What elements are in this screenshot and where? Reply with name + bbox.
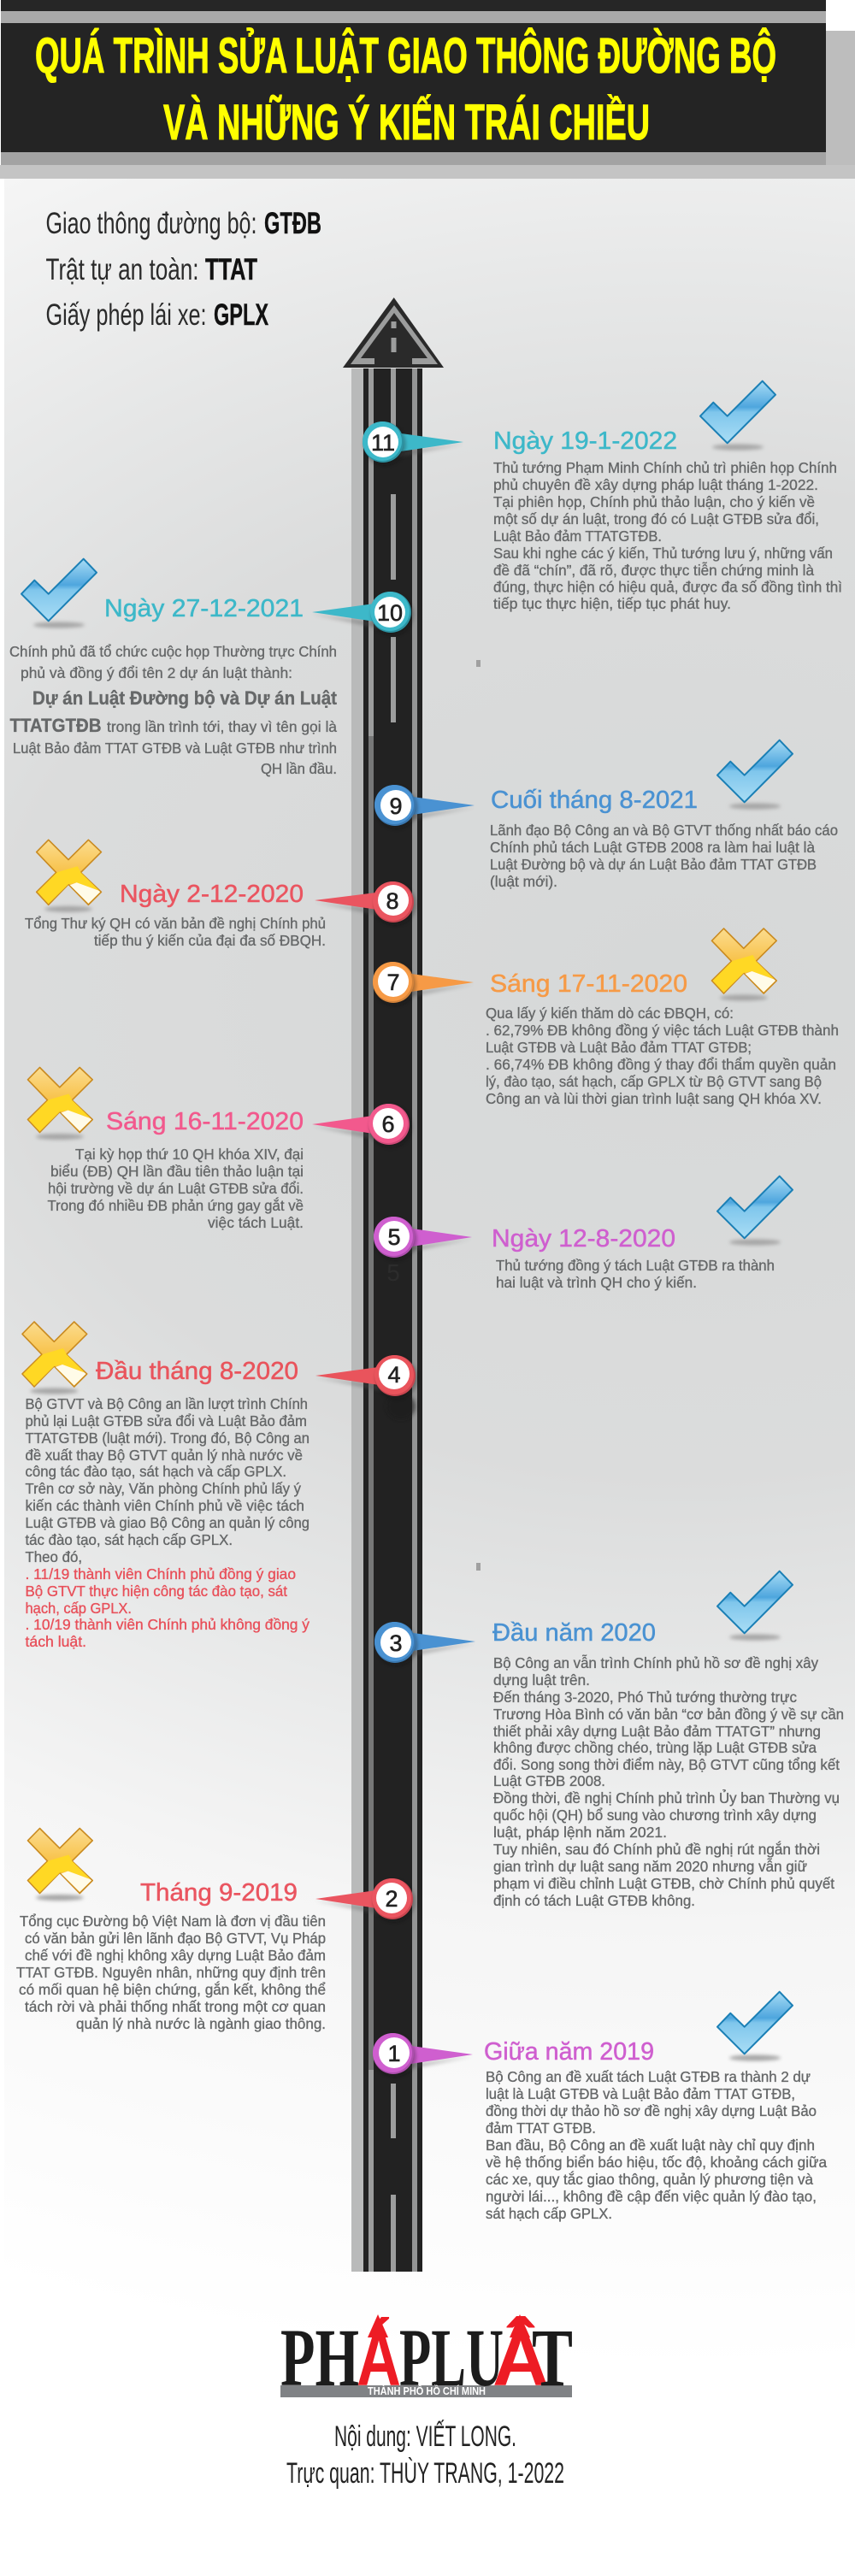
logo: Â: [492, 2315, 549, 2402]
text block: có mối quan hệ biện chứng, gắn kết, không thể: [19, 1980, 326, 1998]
marker 3: 3: [389, 1630, 403, 1656]
panel: event 10: [9, 559, 413, 777]
text block: chế với đề nghị không xây dựng Luật Bảo đảm: [25, 1947, 326, 1964]
text block: Đồng thời, đề nghị Chính phủ trình Ủy ban Thường vụ: [493, 1789, 840, 1807]
text block: công tác đào tạo, sát hạch và cấp GPLX.: [26, 1463, 286, 1480]
heading: Sáng 17-11-2020: [490, 970, 687, 998]
marker 6: 6: [381, 1111, 395, 1137]
text block: [493, 459, 842, 612]
credits: Trực quan: THÙY TRANG, 1-2022: [286, 2457, 564, 2490]
abbreviation legend: [46, 207, 321, 332]
abbreviation legend: TTAT: [205, 253, 257, 286]
road: [351, 368, 422, 2272]
marker 9: [374, 785, 475, 828]
text block: Luật Bảo đảm TTATGTĐB.: [493, 528, 662, 545]
text block: Bộ GTVT và Bộ Công an lần lượt trình Chính: [26, 1395, 308, 1412]
text block: Ban đầu, Bộ Công an đề xuất luật này chỉ quy định: [486, 2137, 815, 2154]
marker 10: 10: [377, 600, 403, 626]
icon: cross: [27, 1828, 92, 1901]
text block: biểu (ĐB) QH lần đầu tiên thảo luận tại: [50, 1163, 304, 1180]
text block: tiếp tục thực hiện, tiếp tục phát huy.: [493, 595, 731, 612]
marker 11: [363, 421, 463, 465]
panel: event 2: [16, 1828, 415, 2032]
text block: [48, 1146, 304, 1231]
text block: (luật mới).: [490, 873, 557, 890]
heading: Sáng 16-11-2020: [106, 1108, 304, 1135]
icon: check: [21, 559, 97, 628]
text block: Tại phiên họp, Chính phủ thảo luận, cho ý kiến về: [493, 493, 815, 510]
logo: Á: [357, 2316, 401, 2402]
abbreviation legend: Giấy phép lái xe:: [46, 298, 207, 332]
logo: PLU: [399, 2312, 504, 2403]
text block: đổi. Song song thời điểm này, Bộ GTVT cũng tổng kết: [493, 1756, 840, 1773]
text block: [25, 915, 326, 949]
marker 4: [315, 1355, 417, 1399]
logo: [280, 2312, 573, 2403]
text block: [490, 822, 838, 890]
marker 5: [374, 1217, 472, 1260]
text block: Thủ tướng đồng ý tách Luật GTĐB ra thành: [496, 1257, 775, 1274]
text block: quốc hội (QH) bổ sung vào chương trình xây dựng: [493, 1807, 817, 1824]
panel: event 5: [374, 1176, 793, 1291]
text block: Luật Đường bộ và dự án Luật Bảo đảm TTAT GTĐB: [490, 856, 817, 873]
panel: event 8: [25, 840, 416, 949]
text block: Lãnh đạo Bộ Công an và Bộ GTVT thống nhất báo cáo: [490, 822, 838, 839]
text block: hai luật và trình QH cho ý kiến.: [496, 1274, 697, 1291]
title: [35, 28, 776, 150]
text block: luật là Luật GTĐB và Luật Bảo đảm TTAT GTĐB,: [486, 2085, 795, 2102]
heading: Ngày 12-8-2020: [492, 1225, 675, 1253]
text block: không được chồng chéo, trùng lặp Luật GTĐB sửa: [493, 1739, 817, 1756]
text block: phủ chuyên đề xây dựng pháp luật tháng 1-2022.: [493, 476, 818, 493]
text block: đề xuất thay Bộ GTVT quản lý nhà nước về: [26, 1447, 303, 1464]
text block: Chính phủ đã tổ chức cuộc họp Thường trực Chính: [9, 643, 337, 660]
text block: lý, đào tạo, sát hạch, cấp GPLX từ Bộ GTVT sang Bộ: [486, 1073, 822, 1090]
text block: Chính phủ tách Luật GTĐB 2008 ra làm hai luật là: [490, 839, 815, 856]
text block: trong lần trình tới, thay vì tên gọi là: [107, 718, 337, 735]
text block: Luật Bảo đảm TTAT GTĐB và Luật GTĐB như trình: [13, 740, 337, 757]
text block: dựng luật trên.: [493, 1671, 590, 1689]
marker 7: [373, 962, 474, 1005]
text block: [486, 1005, 839, 1107]
icon: cross: [711, 928, 776, 1000]
abbreviation legend: GPLX: [214, 298, 268, 332]
panel: event 6: [27, 1067, 411, 1231]
heading: Tháng 9-2019: [140, 1879, 298, 1907]
heading: Ngày 27-12-2021: [104, 595, 304, 622]
text block: một số dự án luật, trong đó có Luật GTĐB sửa đổi,: [493, 510, 819, 528]
abbreviation legend: GTĐB: [264, 207, 321, 240]
heading: Cuối tháng 8-2021: [491, 787, 698, 814]
text block: đúng, thực hiện có hiệu quả, được đa số đồng tình thì: [493, 578, 842, 595]
text block: Trên cơ sở này, Văn phòng Chính phủ lấy ý: [26, 1480, 301, 1497]
text block: về hệ thống biển báo hiệu, tốc độ, khoảng cách giữa: [486, 2154, 827, 2171]
text block: có văn bản gửi lên lãnh đạo Bộ GTVT, Vụ Pháp: [25, 1930, 326, 1947]
text block: hội trường về dự án Luật GTĐB sửa đổi.: [48, 1180, 304, 1197]
logo: THÀNH PHỐ HỒ CHÍ MINH: [368, 2384, 486, 2397]
text block: QH lần đầu.: [261, 760, 337, 777]
text block: phạm vi điều chỉnh Luật GTĐB, chờ Chính phủ quyết: [493, 1875, 834, 1892]
text block: Thủ tướng Phạm Minh Chính chủ trì phiên họp Chính: [493, 459, 837, 476]
text block: đồng thời dự thảo hồ sơ đề nghị xây dựng Luật Bảo: [486, 2102, 817, 2119]
icon: cross: [22, 1322, 87, 1394]
marker 11: 11: [371, 430, 395, 456]
marker 1: [373, 2033, 473, 2077]
marker 9: 9: [389, 793, 403, 819]
icon: cross: [37, 840, 101, 912]
text block: Trong đó nhiều ĐB phản ứng gay gắt về: [48, 1196, 304, 1214]
text block: sát hạch cấp GPLX.: [486, 2205, 612, 2222]
text block: phủ và đồng ý đổi tên 2 dự án luật thành:: [21, 664, 292, 681]
text block: [486, 2068, 827, 2222]
marker 4: 4: [387, 1362, 401, 1388]
text block: Công an và lùi thời gian trình luật sang QH khóa XV.: [486, 1090, 822, 1107]
panel: event 3: [374, 1571, 844, 1909]
marker 7: 7: [386, 970, 400, 995]
text block: . 10/19 thành viên Chính phủ không đồng ý: [26, 1616, 310, 1633]
panel: event 1: [373, 1992, 827, 2222]
credits: Nội dung: VIẾT LONG.: [334, 2420, 516, 2453]
text block: Sau khi nghe các ý kiến, Thủ tướng lưu ý, những vấn: [493, 545, 833, 562]
header banner: [0, 0, 855, 179]
marker 3: [374, 1622, 475, 1665]
text block: Trương Hòa Bình có văn bản “cơ bản đồng ý về sự cần: [493, 1706, 844, 1723]
text block: đảm TTAT GTĐB.: [486, 2119, 596, 2137]
text block: tách luật.: [26, 1633, 86, 1650]
text block: Đến tháng 3-2020, Phó Thủ tướng thường trực: [493, 1689, 797, 1706]
icon: check: [717, 1571, 793, 1640]
text block: người lái..., không đề cập đến việc quản lý đào tạo,: [486, 2188, 817, 2205]
heading: Đầu năm 2020: [492, 1619, 656, 1647]
text block: gian trình dự luật sang năm 2020 nhưng vẫn giữ: [493, 1857, 807, 1875]
text block: [16, 1913, 326, 2032]
icon: cross: [27, 1067, 92, 1140]
text block: [26, 1395, 310, 1650]
marker 8: [315, 881, 416, 925]
text block: Bộ Công an vẫn trình Chính phủ hồ sơ đề nghị xây: [493, 1653, 818, 1671]
small road marker: [476, 660, 481, 667]
road: 5: [386, 1259, 400, 1286]
text block: Luật GTĐB và giao Bộ Công an quản lý công: [26, 1514, 310, 1531]
text block: . 62,79% ĐB không đồng ý việc tách Luật GTĐB thành: [486, 1022, 839, 1039]
marker 2: [315, 1878, 415, 1922]
text block: Bộ GTVT thực hiện công tác đào tạo, sát: [26, 1583, 287, 1600]
logo: T: [532, 2312, 573, 2403]
text block: Luật GTĐB 2008.: [493, 1772, 605, 1789]
text block: việc tách Luật.: [208, 1214, 304, 1231]
logo: PH: [280, 2312, 359, 2403]
text block: tách rời và phải thống nhất trong một cơ quan: [25, 1998, 326, 2015]
heading: Đầu tháng 8-2020: [96, 1358, 298, 1385]
text block: tác đào tạo, sát hạch cấp GPLX.: [26, 1531, 233, 1548]
icon: check: [717, 740, 793, 809]
small road marker: [476, 1563, 481, 1571]
panel: event 9: [374, 740, 838, 890]
text block: Tại kỳ họp thứ 10 QH khóa XIV, đại: [75, 1146, 304, 1163]
text block: kiến các thành viên Chính phủ về việc tách: [26, 1497, 304, 1514]
text block: Tuy nhiên, sau đó Chính phủ đề nghị rút ngắn thời: [493, 1840, 820, 1858]
icon: check: [700, 381, 775, 450]
text block: . 66,74% ĐB không đồng ý thay đổi thẩm quyền quản: [486, 1056, 836, 1073]
marker 5: 5: [387, 1224, 401, 1250]
heading: Ngày 2-12-2020: [120, 881, 304, 908]
marker 1: 1: [387, 2041, 401, 2066]
icon: check: [717, 1992, 793, 2060]
text block: Bộ Công an đề xuất tách Luật GTĐB ra thành 2 dự: [486, 2068, 811, 2085]
text block: luật, pháp lệnh năm 2021.: [493, 1824, 667, 1841]
text block: tiếp thu ý kiến của đại đa số ĐBQH.: [94, 932, 326, 949]
text block: [9, 643, 338, 777]
panel: event 4: [22, 1322, 417, 1650]
marker 2: 2: [385, 1886, 398, 1912]
text block: Qua lấy ý kiến thăm dò các ĐBQH, có:: [486, 1005, 734, 1022]
text block: các xe, quy tắc giao thông, quản lý phương tiện và: [486, 2170, 813, 2188]
text block: Luật GTĐB và Luật Bảo đảm TTAT GTĐB;: [486, 1039, 752, 1056]
road arrow head: [343, 298, 444, 368]
text block: Tổng Thư ký QH có văn bản đề nghị Chính phủ: [25, 915, 326, 932]
text block: đề đã “chín”, đã rõ, được thực tiễn chứng minh là: [493, 561, 814, 579]
text block: Theo đó,: [26, 1548, 82, 1565]
text block: định có tách Luật GTĐB không.: [493, 1892, 695, 1909]
text block: Tổng cục Đường bộ Việt Nam là đơn vị đầu tiên: [20, 1913, 326, 1930]
text block: TTATGTĐB: [10, 715, 101, 736]
heading: Giữa năm 2019: [484, 2038, 654, 2066]
text block: thiết phải xây dựng Luật Bảo đảm TTATGT” nhưng: [493, 1723, 821, 1740]
text block: . 11/19 thành viên Chính phủ đồng ý giao: [26, 1565, 296, 1583]
abbreviation legend: Trật tự an toàn:: [46, 253, 198, 286]
icon: check: [717, 1176, 793, 1245]
credits: [286, 2420, 564, 2490]
marker 10: [312, 592, 413, 635]
panel: event 11: [363, 381, 842, 612]
text block: phủ lại Luật GTĐB sửa đổi và Luật Bảo đảm: [26, 1412, 307, 1429]
text block: quản lý nhà nước là ngành giao thông.: [76, 2015, 326, 2032]
text block: [493, 1653, 844, 1909]
text block: [496, 1257, 775, 1291]
text block: TTATGTĐB (luật mới). Trong đó, Bộ Công an: [26, 1429, 310, 1447]
panel: event 7: [373, 928, 839, 1107]
text block: Dự án Luật Đường bộ và Dự án Luật: [32, 687, 338, 709]
abbreviation legend: Giao thông đường bộ:: [46, 207, 256, 240]
marker 8: 8: [386, 888, 399, 914]
text block: hạch, cấp GPLX.: [26, 1600, 132, 1617]
heading: Ngày 19-1-2022: [493, 427, 677, 455]
marker 6: [312, 1104, 411, 1147]
text block: TTAT GTĐB. Nguyên nhân, những quy định trên: [16, 1964, 326, 1981]
